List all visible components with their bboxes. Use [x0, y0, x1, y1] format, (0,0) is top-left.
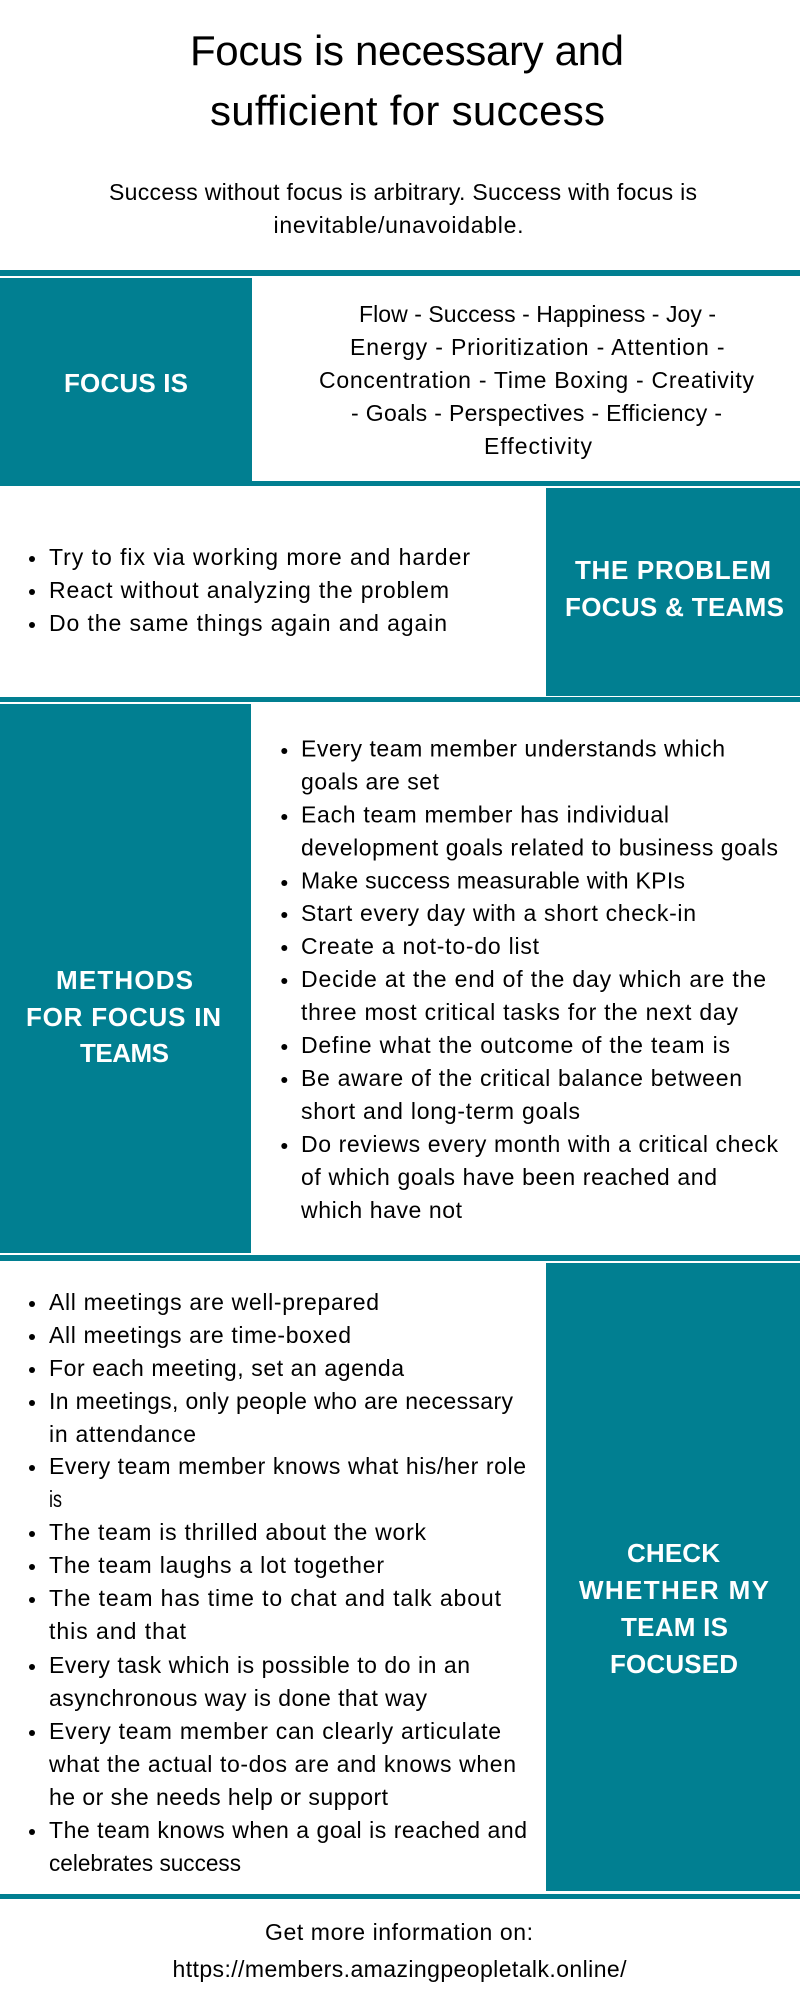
subtitle: inevitable/unavoidable. [274, 212, 524, 238]
bullet list: team checks: For each meeting, set an agenda [49, 1355, 404, 1381]
heading block: check whether my team is focused: WHETHER MY [579, 1575, 769, 1605]
bullet list: team checks [29, 1289, 527, 1876]
bullet list: team checks: in attendance [49, 1421, 196, 1447]
bullet list: team checks: The team is thrilled about the work [49, 1519, 426, 1545]
panel: the problem focus and teams [29, 488, 800, 696]
bullet list: problems: React without analyzing the problem [49, 577, 449, 603]
bullet list: team checks: In meetings, only people who are necessary [49, 1388, 514, 1414]
footer: more information link: https://members.amazingpeopletalk.online/ [172, 1956, 627, 1982]
bullet list: methods: three most critical tasks for the next day [301, 999, 738, 1025]
bullet list: methods: which have not [300, 1197, 463, 1223]
title [190, 27, 624, 134]
bullet list: team checks: Every team member knows what his/her role [49, 1453, 526, 1479]
text block: focus keywords [319, 301, 754, 459]
bullet list: team checks: The team knows when a goal is reached and [49, 1817, 527, 1843]
heading block: check whether my team is focused [546, 1263, 800, 1891]
bullet list: team checks: Every team member can clearly articulate [49, 1718, 501, 1744]
title: Focus is necessary and [190, 27, 624, 74]
bullet list: problems [29, 544, 470, 636]
bullet list: problems: Do the same things again and again [49, 610, 447, 636]
heading block: check whether my team is focused: FOCUSED [610, 1649, 738, 1679]
bullet list: methods: Define what the outcome of the team is [301, 1032, 730, 1058]
bullet list: methods [281, 736, 778, 1223]
bullet list: team checks: Every task which is possible to do in an [49, 1652, 470, 1678]
bullet list: team checks: what the actual to-dos are and knows when [48, 1751, 516, 1777]
heading block: check whether my team is focused: TEAM IS [621, 1612, 728, 1642]
bullet list: team checks: this and that [49, 1618, 187, 1644]
subtitle: Success without focus is arbitrary. Success with focus is [109, 179, 697, 205]
heading block: the problem focus and teams [546, 488, 800, 696]
bullet list: methods: Create a not-to-do list [301, 933, 540, 959]
bullet list: methods: Be aware of the critical balance between [301, 1065, 742, 1091]
heading block: methods for focus in teams: FOR FOCUS IN [26, 1002, 221, 1032]
subtitle [109, 179, 697, 238]
bullet list: methods: of which goals have been reached and [301, 1164, 717, 1190]
bullet list: methods: Decide at the end of the day which are the [301, 966, 766, 992]
bullet list: methods: Start every day with a short check-in [301, 900, 696, 926]
bullet list: methods: Each team member has individual [301, 802, 669, 828]
heading block: check whether my team is focused: CHECK [627, 1538, 720, 1568]
bullet list: team checks: asynchronous way is done that way [49, 1685, 428, 1711]
panel: check whether my team is focused [29, 1263, 800, 1891]
heading block: methods for focus in teams: TEAMS [80, 1038, 169, 1068]
bullet list: team checks: is [49, 1486, 62, 1512]
bullet list: team checks: All meetings are well-prepared [49, 1289, 379, 1315]
heading block: the problem focus and teams: FOCUS & TEAMS [565, 592, 784, 622]
text block: focus keywords: Concentration - Time Boxing - Creativity [319, 367, 754, 393]
bullet list: problems: Try to fix via working more and harder [49, 544, 470, 570]
text block: focus keywords: - Goals - Perspectives - Efficiency - [351, 400, 722, 426]
text block: focus keywords: Energy - Prioritization - Attention - [350, 334, 724, 360]
bullet list: methods: Every team member understands which [301, 736, 725, 762]
heading block: methods for focus in teams [0, 704, 251, 1253]
bullet list: methods: goals are set [301, 768, 440, 794]
panel: methods for focus in teams [0, 704, 778, 1253]
text block: focus keywords: Effectivity [484, 433, 592, 459]
bullet list: methods: development goals related to business goals [301, 834, 778, 860]
heading block: focus is [0, 278, 252, 486]
footer: more information link [172, 1919, 627, 1982]
heading block: methods for focus in teams: METHODS [56, 965, 193, 995]
bullet list: methods: short and long-term goals [301, 1098, 580, 1124]
bullet list: team checks: celebrates success [49, 1850, 241, 1876]
bullet list: team checks: he or she needs help or support [49, 1784, 389, 1810]
text block: focus keywords: Flow - Success - Happiness - Joy - [359, 301, 716, 327]
bullet list: methods: Make success measurable with KPIs [301, 868, 685, 894]
bullet list: team checks: The team laughs a lot together [49, 1552, 384, 1578]
footer: more information link: Get more information on: [265, 1919, 533, 1945]
heading block: focus is: FOCUS IS [64, 368, 188, 398]
panel: focus is [0, 278, 754, 486]
bullet list: team checks: All meetings are time-boxed [49, 1322, 351, 1348]
bullet list: team checks: The team has time to chat and talk about [49, 1585, 502, 1611]
bullet list: methods: Do reviews every month with a critical check [301, 1131, 778, 1157]
title: sufficient for success [210, 87, 605, 134]
heading block: the problem focus and teams: THE PROBLEM [575, 555, 771, 585]
